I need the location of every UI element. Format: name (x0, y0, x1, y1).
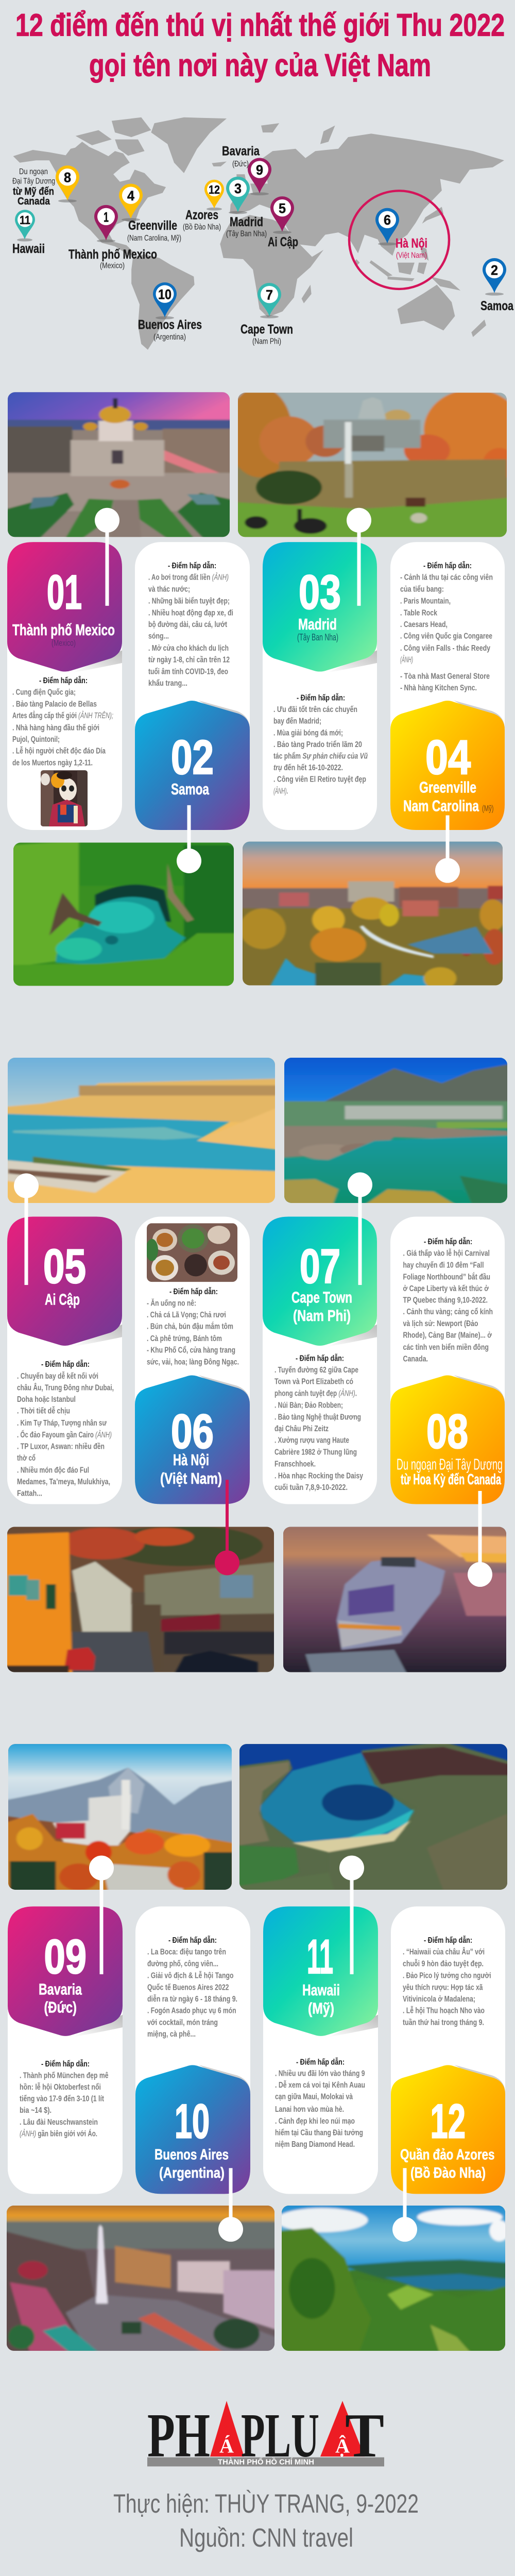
map labels: Đại Tây Dương (12, 177, 55, 186)
pin 1: 1 (104, 209, 109, 225)
panel: 01 Thành phố Mexico (7, 542, 122, 830)
badge: 07: Cape Town (291, 1289, 352, 1306)
text block: 07: . Tuyến đường 62 giữa Cape (274, 1366, 358, 1375)
text block: 12: . Lễ hội Thu hoạch Nho vào (403, 2007, 485, 2015)
text block: 08: - Điểm hấp dẫn: (424, 1236, 472, 1246)
photo: Buenos Aires (3, 2204, 279, 2352)
panel: 06 Hà Nội (135, 1216, 250, 1504)
text block: 11: niệm Bang Diamond Head. (275, 2140, 355, 2149)
text block: 11: . Dễ xem cá voi tại Kênh Auau (275, 2081, 365, 2090)
map labels: Ai Cập (268, 235, 298, 249)
text block: 09: (ẢNH) gần biên giới với Áo. (20, 2129, 97, 2138)
title: gọi tên nơi này của Việt Nam (89, 48, 431, 83)
badge: 05 (7, 1216, 122, 1346)
text block: 07: . Xưởng rượu vang Haute (274, 1436, 349, 1445)
text block: 08: hay chuyến đi 10 đêm “Fall (403, 1261, 484, 1270)
text block: 08: Foliage Northbound” bắt đầu (403, 1272, 490, 1281)
text block: 08: TP Quebec tháng 9,10-2022. (403, 1296, 488, 1304)
badge: 12: (Bồ Đào Nha) (410, 2165, 486, 2181)
pin 11 (15, 210, 35, 240)
map labels: Hawaii (12, 242, 45, 256)
badge: 05: 05 (43, 1240, 86, 1293)
pin 2 (483, 258, 506, 293)
text block: 05: . Chuyến bay dễ kết nối với (17, 1372, 98, 1381)
text block: 06 (147, 1286, 239, 1366)
badge: 01: Thành phố Mexico (12, 621, 115, 639)
text block: 02: từ ngày 1-8, chỉ cần trên 12 (148, 655, 230, 664)
map labels: Buenos Aires (138, 318, 202, 332)
pin 12: 12 (209, 183, 220, 197)
logo: Pháp Luật TP.HCM: PH (147, 2400, 210, 2470)
badge: 11: (Mỹ) (308, 1999, 334, 2018)
pin 3: 3 (234, 181, 242, 196)
text block: 07: Franschhoek. (274, 1460, 316, 1469)
photo: du thuyền Đại Tây Dương (279, 1524, 512, 1674)
text block: 02: tuổi âm tính COVID-19, đeo (148, 668, 228, 676)
pin 10: 10 (158, 287, 171, 302)
text block: 05: - Điểm hấp dẫn: (41, 1359, 90, 1369)
map labels: (Bồ Đào Nha) (183, 223, 221, 231)
text block: 12 (403, 1935, 491, 2027)
logo: Pháp Luật TP.HCM: Á (219, 2435, 234, 2457)
text block: 06: . Cà phê trứng, Bánh tôm (147, 1334, 222, 1343)
photo: Cape Town (281, 1054, 511, 1208)
badge: 11: Hawaii (302, 1981, 340, 1999)
panel: 05 Ai Cập (7, 1216, 122, 1504)
badge: 02 (135, 701, 250, 830)
text block: 05: . TP Luxor, Aswan: nhiều đền (17, 1442, 105, 1451)
text block: 04: - Nhà hàng Kitchen Sync. (400, 684, 477, 692)
pin 6 (375, 208, 399, 243)
text block: 05: . Nhiều món độc đáo Ful (17, 1466, 89, 1475)
panel: 08 Đại Tây Dương (390, 1216, 505, 1504)
badge: 09 (8, 1906, 123, 2036)
text block: 03: - Điểm hấp dẫn: (297, 693, 345, 702)
map pins (15, 158, 506, 319)
badge: 02: Samoa (171, 780, 210, 798)
logo: Pháp Luật TP.HCM: Ậ (335, 2435, 350, 2457)
text block: 03: bay đến Madrid; (273, 717, 321, 726)
logo: Pháp Luật TP.HCM (147, 2400, 384, 2470)
text block: 04: của tiểu bang: (400, 585, 444, 594)
text block: 06: . Chả cá Lã Vọng; Chả rươi (147, 1311, 226, 1319)
badge: 03: (Tây Ban Nha) (297, 632, 338, 642)
text block: 04: (ẢNH) (400, 655, 413, 664)
badge: 08: 08 (426, 1404, 468, 1458)
text block: 12: tuần thứ hai trong tháng 9. (403, 2018, 484, 2027)
text block: 07: đại Châu Phi Zeitz (274, 1425, 329, 1433)
pin 3 (226, 177, 250, 212)
text block: 10: Quốc tế Buenos Aires 2022 (147, 1984, 229, 1992)
map labels: (Tây Ban Nha) (226, 230, 267, 239)
section 1 cards (7, 542, 505, 830)
text block: 07: Town và Port Elizabeth có (274, 1378, 353, 1386)
badge: 12: 12 (431, 2094, 466, 2148)
text block: 07: phong cảnh tuyệt đẹp (ẢNH). (274, 1389, 357, 1398)
badge: 02: 02 (171, 731, 214, 784)
text block: 03: trụ đến hết 16-10-2022. (273, 764, 343, 772)
text block: 01: . Nhà hàng hàng đầu thế giới (12, 724, 99, 732)
badge: 11 (263, 1906, 378, 2036)
text block: 01: . Lễ hội người chết độc đáo Día (12, 747, 106, 756)
badge: 01 (7, 542, 122, 672)
text block: 03: . Ưu đãi tốt trên các chuyến (273, 705, 357, 714)
pin 7 (258, 283, 281, 316)
badge: 04: Nam Carolina (403, 797, 479, 815)
section 2 cards (7, 1216, 505, 1504)
credit: Nguồn: CNN travel (179, 2522, 353, 2552)
logo: Pháp Luật TP.HCM: THÀNH PHỐ HỒ CHÍ MINH (218, 2458, 314, 2466)
text block: 05: Doha hoặc Istanbul (17, 1395, 76, 1404)
text block: 02: . Mở cửa cho khách du lịch (148, 644, 229, 653)
text block: 05: Medames, Ta’meya, Mulukhiya, (17, 1478, 110, 1486)
badge: 04: Greenville (419, 778, 476, 796)
badge: 05: Ai Cập (45, 1291, 80, 1308)
text block: 02: sóng... (148, 632, 169, 641)
text block: 06: . Bún chả, bún đậu mắm tôm (147, 1322, 233, 1331)
text block: 05 (17, 1359, 114, 1498)
text block: 04: . Caesars Head, (400, 620, 448, 629)
world map (13, 117, 504, 350)
map labels: Cape Town (241, 323, 293, 336)
badge: 06 (135, 1375, 250, 1504)
map labels: Du ngoạn (19, 167, 48, 176)
photo: Greenville (240, 839, 506, 990)
badge: 09: 09 (44, 1930, 87, 1984)
badge: 11: 11 (307, 1930, 333, 1984)
text block: 03 (273, 693, 368, 795)
highlight circle: Hà Nội (349, 191, 449, 289)
badge: 10: 10 (175, 2094, 210, 2148)
text block: 02: bộ đường dài, câu cá, lướt (148, 620, 227, 629)
text block: 12: Vitivinicola ở Madalena; (403, 1995, 475, 2004)
text block: 08: Rhode), Cảng Bar (Maine)... ở (403, 1331, 492, 1340)
text block: 02: . Nhiều hoạt động đạp xe, đi (148, 609, 233, 617)
photo: Thành phố Mexico (3, 389, 233, 538)
pin 4 (119, 184, 143, 218)
text block: 09: tiếng vào 17-9 đến 3-10 (1 lít (20, 2095, 104, 2104)
text block: 01: . Cung điện Quốc gia; (12, 688, 76, 697)
logo: Pháp Luật TP.HCM: PLU (241, 2400, 319, 2470)
text block: 01: - Điểm hấp dẫn: (39, 675, 88, 685)
text block: 09 (20, 2059, 109, 2138)
badge: 10: Buenos Aires (154, 2147, 229, 2163)
text block: 05: Fattah... (17, 1489, 42, 1498)
badge: 09: (Đức) (44, 1998, 77, 2016)
badge: 06: (Việt Nam) (160, 1469, 222, 1487)
text block: 02 (148, 561, 233, 688)
text block: 04: . Table Rock (400, 609, 437, 617)
text block: 12: chuỗi 9 hòn đảo tuyệt đẹp. (403, 1959, 484, 1968)
text block: 01: de los Muertos ngày 1,2-11. (12, 758, 93, 767)
text block: 09: - Điểm hấp dẫn: (41, 2059, 90, 2069)
badge: 12 (391, 2065, 505, 2194)
map labels: (Nam Carolina, Mỹ) (127, 234, 181, 243)
pin 10 (153, 282, 177, 317)
text block: 05: . Ốc đảo Fayoum gần Cairo (ẢNH) (17, 1430, 112, 1439)
text block: 06: sức, vải, hoa; làng Đông Ngạc. (147, 1358, 239, 1366)
text block: 04: . Công viên Falls - thác Reedy (400, 644, 490, 653)
pin 8 (56, 165, 79, 200)
badge: 04: (Mỹ) (482, 804, 494, 814)
text block: 08: . Cảnh thu vàng; cảng cổ kính (403, 1308, 493, 1316)
text block: 12: - Điểm hấp dẫn: (424, 1935, 472, 1945)
text block: 10: đường phố, công viên... (147, 1959, 218, 1968)
text block: 11: hiểm tại Cầu thang Đài tưởng (275, 2129, 363, 2137)
text block: 02: . Những bãi biển tuyệt đẹp; (148, 597, 230, 605)
badge: 06: 06 (171, 1404, 214, 1458)
credit: Thực hiện: THÙY TRANG, 9-2022 (113, 2489, 419, 2518)
panel: 04 Greenville (390, 542, 505, 830)
photo: Día de los Muertos (41, 770, 88, 826)
map labels: (Argentina) (153, 333, 186, 342)
photo: Madrid (238, 393, 507, 537)
pin 4: 4 (127, 188, 134, 204)
photo: Ai Cập (3, 1054, 283, 1208)
connector: Hà Nội (215, 1480, 239, 1575)
text block: 12: . Đảo Pico lý tưởng cho người (403, 1972, 491, 1980)
text block: 03: (ẢNH). (273, 786, 288, 795)
map labels: Greenville (128, 219, 177, 233)
text block: 05: thờ cổ (17, 1454, 36, 1463)
text block: 04 (400, 561, 493, 692)
text block: 04: - Điểm hấp dẫn: (423, 561, 472, 570)
badge: 04: 04 (425, 731, 471, 784)
text block: 04: - Cảnh lá thu tại các công viên (400, 573, 493, 582)
text block: 01: . Bảo tàng Palacio de Bellas (12, 700, 97, 708)
text block: 06: - Điểm hấp dẫn: (169, 1286, 218, 1296)
text block: 10 (147, 1935, 237, 2039)
text block: 02: . Ao bơi trong đất liền (ẢNH) (148, 573, 229, 582)
connectors: section 2 (14, 1173, 492, 1587)
map labels: (Đức) (232, 160, 249, 168)
text block: 03: . Mùa giải bóng đá mới; (273, 728, 343, 737)
text block: 11: Lanai hơn vào mùa hè. (275, 2105, 344, 2114)
pin 5 (270, 196, 294, 232)
text block: 07: . Núi Bàn; Đảo Robben; (274, 1401, 343, 1410)
map labels: Bavaria (222, 145, 260, 159)
badge: 07: (Nam Phi) (293, 1307, 351, 1325)
logo: Pháp Luật TP.HCM: T (345, 2400, 384, 2470)
badge: 06: Hà Nội (173, 1451, 209, 1469)
text block: 02: khẩu trang... (148, 679, 187, 688)
text block: 10: diễn ra từ ngày 6 - 18 tháng 9. (147, 1995, 237, 2004)
text block: 10: - Điểm hấp dẫn: (168, 1935, 217, 1945)
text block: 08: Canada. (403, 1355, 428, 1363)
text block: 09: hồn: lễ hội Oktoberfest nổi (20, 2083, 101, 2092)
badge: 09: Bavaria (39, 1980, 82, 1998)
text block: 04: . Paris Mountain, (400, 597, 451, 605)
text block: 08 (403, 1236, 493, 1363)
pin 2: 2 (491, 263, 498, 278)
text block: 07: - Điểm hấp dẫn: (296, 1353, 344, 1363)
text block: 06: - Ăn uống no nê: (147, 1299, 196, 1308)
panel: 03 Madrid (263, 542, 377, 830)
text block: 08: ở Cape Liberty và kết thúc ở (403, 1284, 489, 1293)
text block: 03: tác phẩm Sự phản chiếu của Vũ (273, 752, 368, 760)
badge: 01: 01 (47, 565, 82, 619)
connectors: section 3 (89, 1856, 417, 2242)
text block: 02: - Điểm hấp dẫn: (168, 561, 216, 570)
panel: 09 Bavaria (8, 1906, 123, 2194)
text block: 09: . Lâu đài Neuschwanstein (20, 2118, 98, 2127)
text block: 07: . Hòa nhạc Rocking the Daisy (274, 1471, 363, 1480)
text block: 10: với cocktail, món tráng (147, 2018, 218, 2027)
text block: 07 (274, 1353, 363, 1492)
pin 1 (94, 205, 118, 241)
pin 6: 6 (384, 212, 391, 228)
map labels: Azores (185, 209, 218, 222)
badge: 08 (390, 1375, 505, 1504)
pin 8: 8 (64, 170, 71, 185)
badge: 07: 07 (300, 1240, 340, 1293)
title (15, 8, 505, 83)
credit (113, 2489, 419, 2552)
text block: 07: Cabrière 1982 ở Thung lũng (274, 1448, 357, 1457)
photo: ẩm thực Hà Nội (146, 1223, 237, 1282)
map labels (12, 145, 513, 346)
photo: Hà Nội (3, 1524, 279, 1674)
text block: 09: . Thành phố München đẹp mê (20, 2072, 109, 2080)
text block: 07: cuối tuần 7,8,9-10-2022. (274, 1483, 348, 1492)
pin 9 (248, 158, 271, 193)
badge: 10 (135, 2065, 250, 2194)
text block: 03: . Công viên El Retiro tuyệt đẹp (273, 775, 366, 784)
map labels: Thành phố Mexico (68, 248, 157, 262)
text block: 09: bia ~14 $). (20, 2106, 52, 2115)
text block: 10: miệng, cà phê... (147, 2030, 196, 2039)
map labels: từ Mỹ đến (13, 185, 54, 197)
text block: 10: . La Boca: điệu tango trên (147, 1948, 226, 1957)
text block: 11 (275, 2057, 365, 2149)
pin 5: 5 (279, 201, 286, 216)
text block: 07: . Bảo tàng Nghệ thuật Đương (274, 1413, 361, 1421)
badge: 04 (390, 701, 505, 830)
map labels: Hà Nội (396, 237, 427, 250)
photo: Hawaii (236, 1741, 512, 1892)
map labels: (Nam Phi) (252, 337, 281, 346)
text block: 01 (12, 675, 113, 767)
text block: 08: . Giá thấp vào lễ hội Carnival (403, 1249, 490, 1258)
panel: 12 Azores (391, 1906, 505, 2194)
text block: 11: . Cảnh đẹp khi leo núi mạo (275, 2117, 355, 2126)
text block: 05: . Thời tiết dễ chịu (17, 1407, 70, 1416)
text block: 05: . Kim Tự Tháp, Tượng nhân sư (17, 1419, 107, 1428)
text block: 08: và lịch sử: Newport (Đảo (403, 1319, 478, 1328)
map labels: Canada (18, 195, 50, 207)
badge: 03 (263, 542, 377, 672)
badge: 01: (Mexico) (52, 638, 76, 648)
text block: 10: . Fogón Asado phục vụ 6 món (147, 2007, 236, 2015)
text block: 08: các tỉnh ven biển miền đông (403, 1343, 489, 1352)
photo: Samoa (11, 841, 236, 988)
connectors: section 1 (95, 508, 460, 883)
text block: 12: . “Haiwaii của châu Âu” với (403, 1947, 485, 1957)
photo: Bavaria (5, 1741, 235, 1892)
badge: 03: Madrid (298, 615, 337, 633)
map labels: (Mexico) (100, 262, 125, 270)
pin 9: 9 (256, 162, 263, 178)
pin 7: 7 (266, 287, 273, 302)
photo: quần đảo Azores (276, 2204, 509, 2355)
text block: 11: cạn giữa Maui, Molokai và (275, 2093, 353, 2102)
badge: 10: (Argentina) (159, 2165, 225, 2181)
panel: 07 Cape Town (263, 1216, 377, 1504)
text block: 12: yêu thích rượu: Hợp tác xã (403, 1984, 483, 1992)
text block: 11: - Điểm hấp dẫn: (296, 2057, 345, 2066)
text block: 05: châu Âu, Trung Đông như Dubai, (17, 1383, 114, 1392)
pin 12 (204, 180, 224, 209)
pin 11: 11 (20, 213, 30, 227)
text block: 03: . Bảo tàng Prado triển lãm 20 (273, 740, 362, 749)
badge: 07 (263, 1216, 377, 1346)
badge: 03: 03 (299, 565, 341, 619)
text block: 04: - Tòa nhà Mast General Store (400, 672, 490, 681)
text block: 06: - Khu Phố Cổ, cửa hàng trang (147, 1346, 235, 1355)
panel: 02 Samoa (135, 542, 250, 830)
panel: 10 Buenos Aires (135, 1906, 250, 2194)
panel: 11 Hawaii (263, 1906, 378, 2194)
map labels: (Việt Nam) (396, 251, 427, 260)
text block: 01: Artes đẳng cấp thế giới (ẢNH TRÊN); (12, 711, 113, 720)
text block: 01: Pujol, Quintonil; (12, 735, 60, 744)
map labels: Madrid (230, 215, 263, 229)
text block: 02: và thác nước; (148, 585, 190, 594)
text block: 11: . Nhiều ưu đãi lớn vào tháng 9 (275, 2070, 365, 2078)
section 3 cards (8, 1906, 505, 2194)
text block: 10: . Giải vô địch & Lễ hội Tango (147, 1972, 234, 1980)
